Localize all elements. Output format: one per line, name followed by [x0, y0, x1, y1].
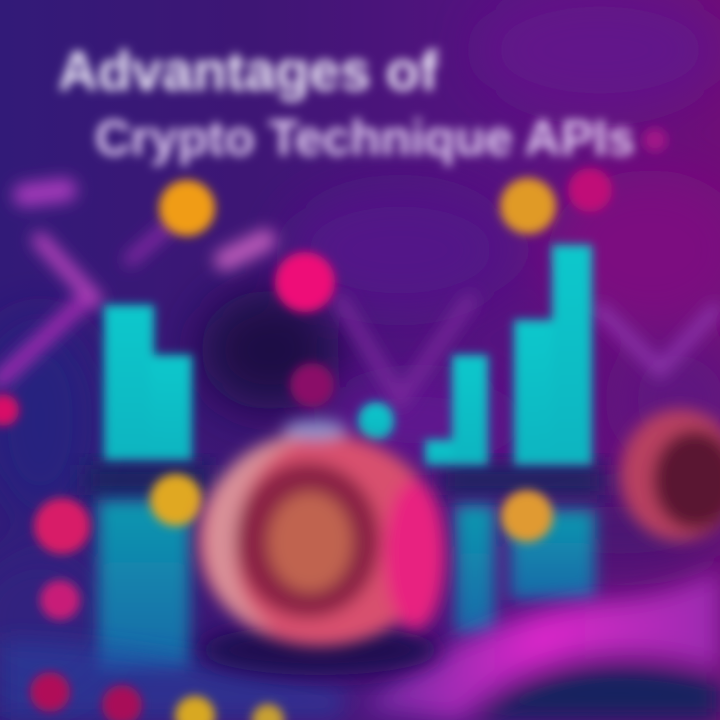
orange coins	[150, 178, 556, 542]
yellow coins at bottom	[175, 696, 284, 720]
small coin on right	[620, 409, 720, 541]
bar chart: right	[358, 245, 592, 465]
pink dots	[0, 128, 667, 720]
bar chart: left	[104, 305, 192, 460]
reflected bars	[98, 500, 595, 670]
line chart strokes	[0, 190, 715, 400]
title	[58, 39, 635, 166]
title: Advantages of	[58, 39, 438, 102]
title: Crypto Technique APIs	[95, 110, 635, 166]
wave at bottom right	[0, 570, 720, 720]
dark bases under bars	[85, 465, 605, 495]
large coin	[198, 420, 445, 675]
